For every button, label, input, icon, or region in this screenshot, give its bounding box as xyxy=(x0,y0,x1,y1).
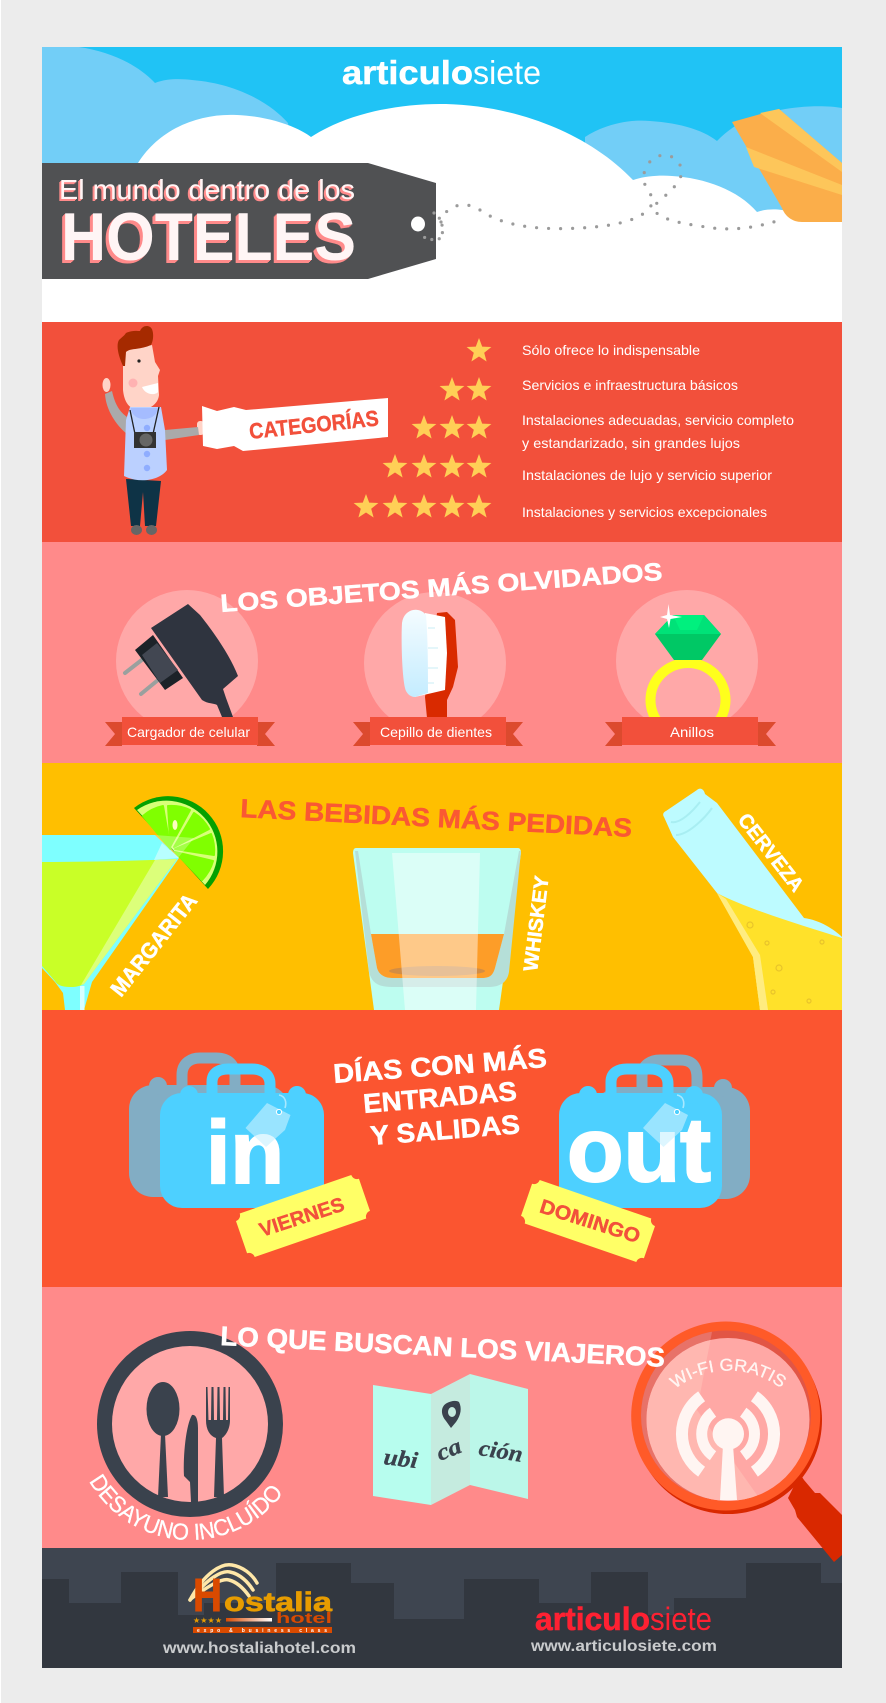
ticket: domingo xyxy=(519,1178,657,1264)
logo: articulosiete footer xyxy=(535,1601,712,1637)
panel: categories xyxy=(42,322,842,542)
luggage tag with title xyxy=(42,163,443,279)
heading: days: ENTRADAS xyxy=(362,1076,518,1119)
category descriptions: Instalaciones de lujo y servicio superior xyxy=(522,467,772,483)
logo: hostalia: expo & business class xyxy=(197,1628,327,1634)
stars: two xyxy=(440,377,491,400)
icon: toothbrush xyxy=(402,610,458,718)
map text: ción xyxy=(477,1435,525,1467)
icon: plate and cutlery xyxy=(97,1331,283,1517)
panel: forgotten objects xyxy=(42,542,842,763)
icon: plane wing xyxy=(732,109,842,222)
logo: articulosiete footer: siete xyxy=(650,1601,712,1637)
suitcase: out: out xyxy=(567,1100,711,1201)
icon: folded map xyxy=(373,1374,528,1505)
title line 2: HOTELES xyxy=(61,199,356,275)
dotted flight path xyxy=(441,155,780,229)
logo: articulosiete xyxy=(342,60,540,84)
category descriptions: y estandarizado, sin grandes lujos xyxy=(522,435,740,451)
heading: drinks: LAS BEBIDAS MÁS PEDIDAS xyxy=(240,793,633,843)
ticket: viernes xyxy=(234,1173,372,1259)
map text xyxy=(382,1433,525,1473)
logo: hostalia xyxy=(190,1565,333,1634)
suitcase: out xyxy=(559,1060,750,1208)
heading: travellers: LO QUE BUSCAN LOS VIAJEROS xyxy=(220,1321,666,1373)
ribbon: rings label: Anillos xyxy=(670,724,714,740)
panel: header sky xyxy=(42,47,842,322)
illustration: margarita xyxy=(42,796,223,1010)
logo: hostalia: ostalia xyxy=(224,1587,333,1617)
icon: charger xyxy=(125,604,238,717)
ribbon: rings label xyxy=(605,717,776,746)
stars: one xyxy=(467,338,491,362)
logo: articulosiete: articulo xyxy=(342,54,473,91)
logo: articulosiete footer: articulo xyxy=(535,1601,650,1637)
illustration: beer bottle xyxy=(663,789,842,1010)
skyline xyxy=(42,1563,842,1668)
stars: four xyxy=(383,454,491,478)
title line 1: El mundo dentro de los xyxy=(59,174,355,205)
panel: footer xyxy=(42,1548,842,1668)
stars: three xyxy=(412,415,491,438)
map text: ca xyxy=(433,1433,465,1466)
logo: hostalia: H xyxy=(193,1569,222,1621)
icon: ring xyxy=(650,604,726,737)
magnifier handle tip over footer xyxy=(822,1548,842,1562)
label: whiskey: WHISKEY xyxy=(520,874,554,973)
ticket: domingo: DOMINGO xyxy=(537,1196,643,1248)
banner: categorías xyxy=(202,398,388,451)
panel: drinks xyxy=(42,763,842,1010)
lime slice xyxy=(134,796,223,889)
map pin xyxy=(442,1401,461,1428)
ribbon: toothbrush label xyxy=(353,717,523,746)
panel: what travellers look for xyxy=(42,1287,842,1548)
map text: ubi xyxy=(382,1444,420,1473)
suitcase: in: in xyxy=(206,1102,284,1202)
illustration: tourist xyxy=(102,326,204,535)
category descriptions: Instalaciones adecuadas, servicio completo xyxy=(522,412,794,428)
label: free wifi: WI-FI GRATIS xyxy=(668,1358,786,1387)
heading: days: DÍAS CON MÁS xyxy=(332,1042,548,1089)
category descriptions: Instalaciones y servicios excepcionales xyxy=(522,504,767,520)
ticket: viernes: VIERNES xyxy=(257,1194,347,1242)
wifi symbol xyxy=(682,1396,774,1472)
stars: five xyxy=(354,494,491,518)
label: breakfast included: DESAYUNO INCLUÍDO xyxy=(90,1474,280,1540)
label: margarita: MARGARITA xyxy=(105,888,202,1001)
url: articulosiete: www.articulosiete.com xyxy=(530,1638,717,1655)
ribbon: charger label xyxy=(105,717,275,746)
heading: forgotten objects: LOS OBJETOS MÁS OLVIDADOS xyxy=(219,557,663,618)
icon: magnifying glass with wifi xyxy=(620,1310,842,1562)
label: cerveza: CERVEZA xyxy=(733,810,808,896)
ribbon: charger label: Cargador de celular xyxy=(127,724,250,740)
suitcase: in xyxy=(129,1058,324,1208)
white clouds xyxy=(42,104,842,322)
logo: hostalia: ★★★★ xyxy=(193,1616,222,1625)
category descriptions xyxy=(522,342,794,520)
category descriptions: Servicios e infraestructura básicos xyxy=(522,377,738,393)
url: hostalia: www.hostaliahotel.com xyxy=(162,1640,356,1657)
banner: categorías: CATEGORÍAS xyxy=(248,406,380,444)
heading: days: Y SALIDAS xyxy=(369,1109,521,1151)
illustration: whiskey glass xyxy=(353,848,521,1010)
logo: hostalia: hotel xyxy=(276,1610,332,1627)
heading: days xyxy=(332,1042,548,1151)
category descriptions: Sólo ofrece lo indispensable xyxy=(522,342,700,358)
logo: articulosiete: siete xyxy=(473,54,541,91)
ribbon: toothbrush label: Cepillo de dientes xyxy=(380,724,492,740)
light clouds xyxy=(42,47,842,212)
panel: check-in days xyxy=(42,1010,842,1287)
